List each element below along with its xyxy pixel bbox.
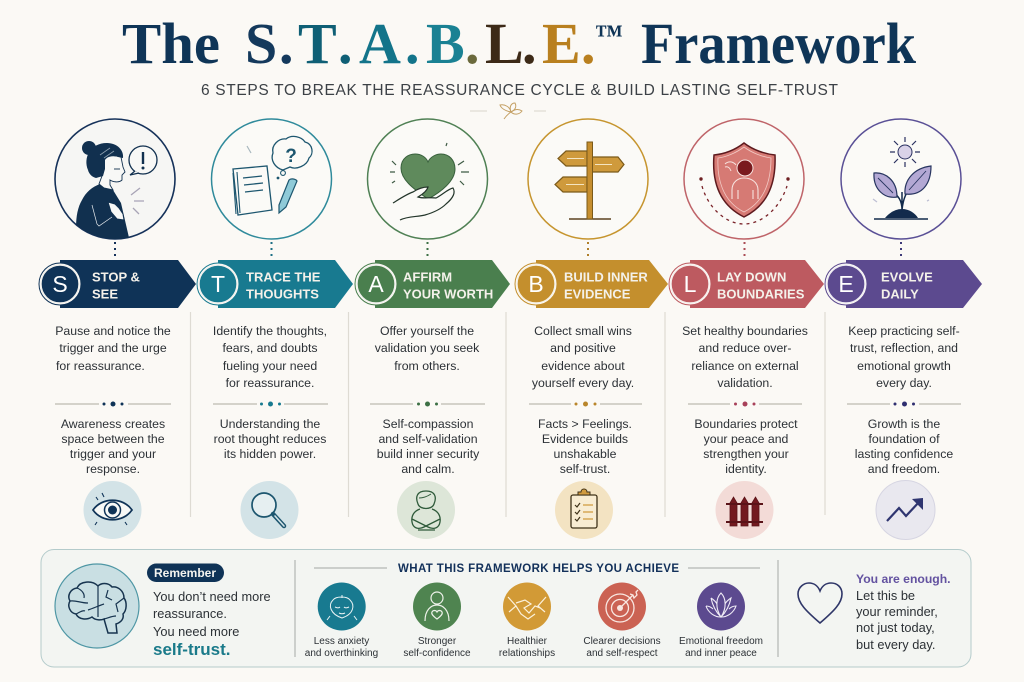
description: emotional growth: [857, 359, 951, 373]
banner: lay down boundaries: BOUNDARIES: [717, 286, 805, 302]
description: [682, 324, 808, 390]
description: reliance on external: [691, 359, 799, 373]
benefit: less anxiety: Less anxiety: [314, 636, 369, 647]
title: .: [279, 11, 294, 76]
banner: evolve daily: EVOLVE: [881, 270, 933, 284]
title: [122, 11, 917, 76]
banner: trace the thoughts: THOUGHTS: [246, 286, 319, 302]
description: [532, 324, 634, 390]
title: A: [359, 11, 401, 76]
banner: trace the thoughts: [197, 260, 353, 308]
icon: signpost: [528, 119, 648, 239]
banner: affirm your worth: AFFIRM: [403, 270, 452, 284]
insight: your peace and: [704, 432, 789, 446]
panel: bottom summary: [41, 550, 971, 667]
icon: self hug: [397, 481, 455, 539]
remember message: reassurance.: [153, 606, 227, 621]
banner: trace the thoughts: TRACE THE: [246, 270, 321, 284]
insight: Understanding the: [220, 417, 320, 431]
description: evidence about: [541, 359, 625, 373]
banner: stop and see: STOP &: [92, 270, 140, 284]
description: fears, and doubts: [222, 341, 318, 355]
banner: build inner evidence: B: [528, 271, 544, 297]
benefit: stronger self-confidence: self-confidence: [403, 648, 471, 659]
description: [848, 324, 960, 390]
icon: magnifier: [240, 481, 298, 539]
insight: Self-compassion: [383, 417, 474, 431]
divider: [370, 402, 485, 406]
insight: trigger and your: [70, 447, 156, 461]
remember message: [147, 564, 271, 659]
description: trigger and the urge: [59, 341, 167, 355]
banner: stop and see: SEE: [92, 286, 118, 302]
subtitle: 6 STEPS TO BREAK THE REASSURANCE CYCLE & BUILD LASTING SELF-TRUST: [201, 82, 839, 99]
insight: and calm.: [401, 462, 455, 476]
insight: space between the: [61, 432, 165, 446]
benefit: less anxiety: [305, 582, 378, 659]
benefit: healthier relationships: [499, 582, 555, 659]
description: from others.: [394, 359, 460, 373]
insight: foundation of: [868, 432, 940, 446]
benefit: clearer decisions: and self-respect: [586, 648, 658, 659]
icon: clipboard checklist: [555, 481, 613, 539]
insight: Boundaries protect: [694, 417, 798, 431]
benefit: emotional freedom: and inner peace: [685, 648, 757, 659]
title: E: [542, 11, 581, 76]
benefit: stronger self-confidence: [403, 582, 471, 659]
step column B: [515, 119, 668, 539]
divider: [213, 402, 328, 406]
banner: stop and see: [39, 260, 196, 308]
divider: [688, 402, 802, 406]
icon: brain: [55, 564, 139, 648]
icon: woman with hand on chest: [55, 119, 175, 242]
benefit: healthier relationships: Healthier: [507, 636, 548, 647]
step column A: [355, 119, 510, 539]
remember message: self-trust.: [153, 640, 230, 659]
description: fueling your need: [223, 359, 317, 373]
icon: trend arrow: [876, 480, 935, 540]
banner: affirm your worth: YOUR WORTH: [403, 286, 493, 302]
description: Collect small wins: [534, 324, 632, 338]
insight: Awareness creates: [61, 417, 165, 431]
benefit: emotional freedom: Emotional freedom: [679, 636, 763, 647]
title: .: [338, 11, 352, 76]
remember message: You need more: [153, 624, 239, 639]
divider: [847, 402, 961, 406]
banner: evolve daily: DAILY: [881, 286, 919, 302]
title: .: [465, 11, 480, 76]
step column E: [825, 119, 982, 540]
benefit: clearer decisions: Clearer decisions: [583, 636, 661, 647]
divider: [55, 402, 171, 406]
closing message: [856, 572, 951, 652]
description: every day.: [876, 376, 932, 390]
description: Offer yourself the: [380, 324, 474, 338]
icon: notebook, pen and thought bubble: ?: [285, 146, 297, 167]
connector: [587, 242, 589, 258]
insight: [214, 417, 326, 461]
heading: what this framework helps you achieve: WHAT THIS FRAMEWORK HELPS YOU ACHIEVE: [398, 563, 679, 575]
description: validation.: [717, 376, 773, 390]
icon: notebook, pen and thought bubble: [212, 119, 332, 239]
description: Identify the thoughts,: [213, 324, 327, 338]
insight: strengthen your: [703, 447, 789, 461]
insight: self-trust.: [560, 462, 610, 476]
connector: [900, 242, 902, 258]
divider: [529, 402, 642, 406]
ornament: leaf: [470, 103, 546, 119]
banner: trace the thoughts: T: [211, 271, 225, 297]
benefit: emotional freedom: [679, 582, 763, 659]
insight: its hidden power.: [224, 447, 316, 461]
title: .: [581, 11, 596, 76]
description: [213, 324, 327, 390]
insight: [61, 417, 165, 476]
description: and reduce over-: [699, 341, 791, 355]
description: for reassurance.: [56, 359, 145, 373]
title: The: [122, 11, 220, 76]
insight: Growth is the: [868, 417, 940, 431]
banner: affirm your worth: A: [368, 271, 384, 297]
closing message: your reminder,: [856, 604, 938, 619]
description: for reassurance.: [226, 376, 314, 390]
banner: lay down boundaries: LAY DOWN: [717, 270, 786, 284]
banner: lay down boundaries: L: [684, 271, 697, 297]
banner: lay down boundaries: [669, 260, 824, 308]
insight: [694, 417, 798, 476]
title: T: [298, 11, 337, 76]
insight: [538, 417, 632, 476]
connector: [114, 242, 116, 258]
description: [375, 324, 480, 373]
description: Keep practicing self-: [848, 324, 960, 338]
description: Pause and notice the: [55, 324, 171, 338]
remember message: Remember: [154, 566, 216, 580]
insight: response.: [86, 462, 140, 476]
description: trust, reflection, and: [850, 341, 958, 355]
benefit: healthier relationships: relationships: [499, 648, 555, 659]
connector: [270, 242, 272, 258]
step column S: [39, 119, 196, 539]
insight: lasting confidence: [855, 447, 953, 461]
description: Set healthy boundaries: [682, 324, 808, 338]
banner: evolve daily: [825, 260, 982, 308]
insight: and freedom.: [868, 462, 940, 476]
insight: Evidence builds: [542, 432, 628, 446]
banner: affirm your worth: [355, 260, 510, 308]
insight: [855, 417, 953, 476]
icon: shield with person: [684, 119, 804, 239]
title: .: [522, 11, 536, 76]
banner: stop and see: S: [52, 271, 68, 297]
closing message: You are enough.: [856, 572, 951, 586]
title: S: [245, 11, 277, 76]
description: yourself every day.: [532, 376, 634, 390]
insight: Facts > Feelings.: [538, 417, 632, 431]
insight: [377, 417, 480, 476]
connector: [426, 242, 428, 258]
icon: growing plant with sun: [841, 119, 961, 239]
title: .: [405, 11, 420, 76]
banner: build inner evidence: [515, 260, 668, 308]
icon: fence: [716, 481, 774, 539]
description: and positive: [550, 341, 616, 355]
insight: unshakable: [554, 447, 617, 461]
remember message: You don’t need more: [153, 589, 271, 604]
closing message: not just today,: [856, 620, 935, 635]
icon: heart outline: [798, 583, 842, 623]
benefit: clearer decisions: [583, 582, 661, 659]
icon: eye: [84, 481, 142, 539]
insight: identity.: [725, 462, 767, 476]
title: L: [485, 11, 524, 76]
banner: build inner evidence: EVIDENCE: [564, 286, 631, 302]
description: [55, 324, 171, 373]
banner: build inner evidence: BUILD INNER: [564, 270, 648, 284]
insight: and self-validation: [378, 432, 478, 446]
connector: [744, 242, 746, 258]
insight: root thought reduces: [214, 432, 326, 446]
icon: heart in hand: [368, 119, 488, 239]
benefit: less anxiety: and overthinking: [305, 648, 378, 659]
banner: evolve daily: E: [838, 271, 854, 297]
step column L: [669, 119, 824, 539]
step column T: [197, 119, 353, 539]
insight: build inner security: [377, 447, 480, 461]
benefit: stronger self-confidence: Stronger: [418, 636, 457, 647]
closing message: Let this be: [856, 588, 915, 603]
title: Framework: [641, 11, 917, 76]
title: ™: [595, 20, 623, 51]
title: B: [426, 11, 465, 76]
description: validation you seek: [375, 341, 480, 355]
closing message: but every day.: [856, 637, 935, 652]
